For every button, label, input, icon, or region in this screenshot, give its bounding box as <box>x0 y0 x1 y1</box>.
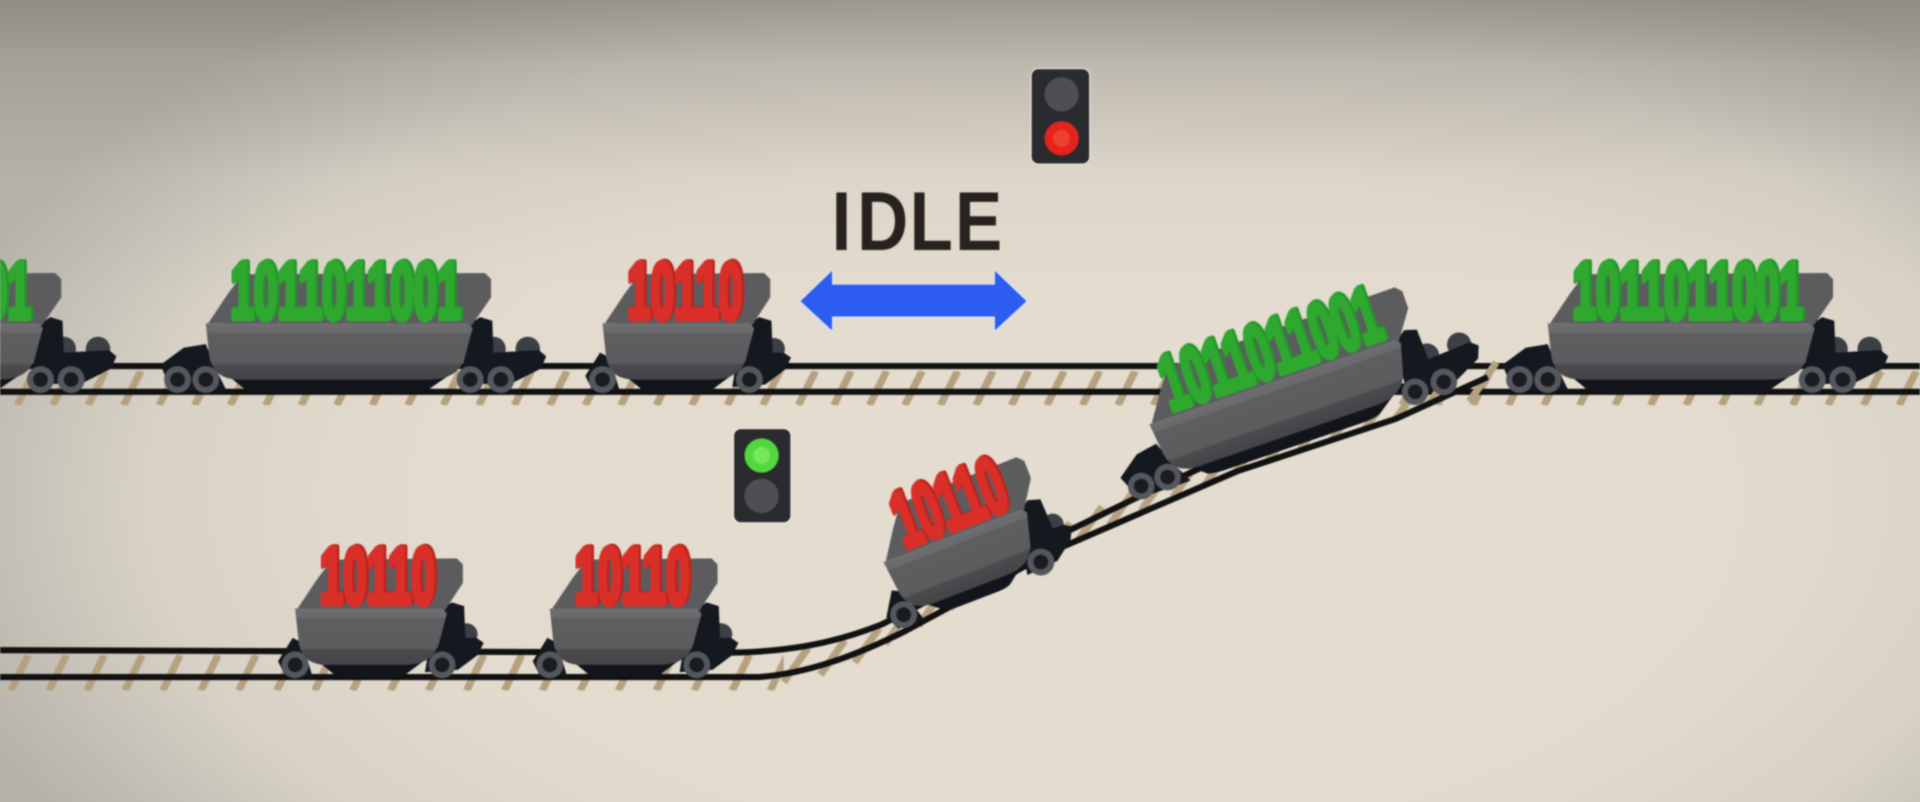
load: red binary: 10110 <box>320 532 435 621</box>
cart: red 10110, lower track middle <box>533 532 738 678</box>
load: green binary: 1011011001 <box>1148 270 1392 428</box>
cart: red 10110, upper track <box>585 246 791 393</box>
arrow: blue double-headed idle gap <box>800 269 1027 332</box>
cart: green 1011011001, climbing ramp <box>1082 243 1491 504</box>
icon: red traffic signal <box>1031 69 1090 164</box>
icon: green traffic signal <box>733 429 791 523</box>
load: red binary: 10110 <box>627 246 742 335</box>
load: red binary: 10110 <box>574 532 689 621</box>
cart: green 1011011001, upper track <box>160 246 546 393</box>
cart: green 1011011001, upper track right <box>1502 246 1888 393</box>
lower railway track with ramp <box>0 362 1496 691</box>
heading: IDLE: IDLE <box>832 175 1002 268</box>
cart: red 10110, climbing ramp <box>840 423 1085 633</box>
cart: red 10110, lower track left <box>278 532 484 678</box>
cart: green 1011011001, cropped left <box>0 246 116 393</box>
load: red binary: 10110 <box>879 440 1018 565</box>
upper railway track <box>0 366 1920 405</box>
load: green binary: 1011011001 <box>230 246 460 335</box>
